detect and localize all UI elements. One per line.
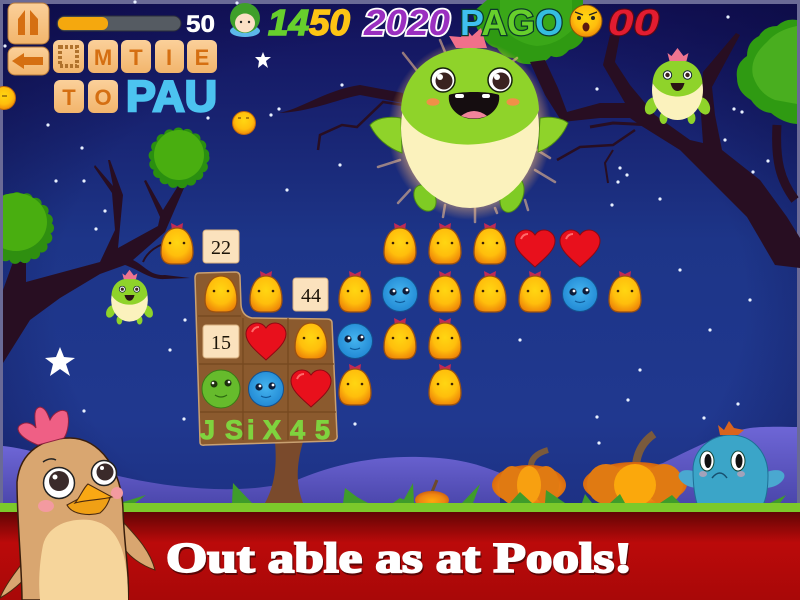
game grid row 2 [205, 271, 641, 312]
tile 44 [293, 278, 328, 311]
hen mascot [0, 407, 155, 600]
HUD: letter tiles: O [94, 85, 112, 110]
HUD: score 1450: 1450 [268, 2, 350, 43]
HUD: red zeros: 00 [608, 2, 659, 43]
white star left [45, 347, 75, 376]
wings [0, 548, 40, 598]
tree crown: left [0, 190, 48, 268]
HUD: pause button [8, 3, 49, 44]
tree crown: right [737, 20, 797, 124]
medium pumpkin [492, 450, 566, 505]
tree crown: top [473, 0, 583, 64]
post [265, 442, 303, 503]
tile 44: 44 [301, 285, 321, 307]
tile 22: 22 [211, 237, 231, 259]
tile 15: 15 [211, 332, 231, 354]
belly [39, 520, 128, 600]
body [17, 438, 128, 600]
stars [3, 0, 770, 445]
burst glow and rays [378, 40, 555, 222]
mouth [449, 92, 499, 119]
game grid row 1 [161, 223, 600, 267]
crest [449, 28, 487, 48]
small green monster on branch [642, 48, 713, 124]
HUD: PAU word: PAU [126, 72, 217, 121]
small green monster at left [104, 270, 155, 324]
orange ball left [0, 86, 16, 110]
blue sad monster [676, 421, 787, 507]
HUD: letter tiles: M [94, 45, 112, 70]
arms [538, 117, 568, 152]
HUD: avatar icon [230, 3, 260, 37]
left eye [44, 468, 74, 498]
game grid row 4 [202, 364, 461, 408]
green blob [202, 370, 240, 408]
small pumpkin [415, 480, 449, 509]
beak [67, 484, 112, 514]
HUD: letter tiles: I [166, 45, 172, 70]
HUD: surprised emoji [570, 5, 602, 37]
brow [43, 459, 56, 462]
right eye [92, 460, 116, 486]
signpost board [195, 272, 337, 503]
cheeks [38, 500, 54, 512]
game grid row 3 [203, 318, 461, 360]
red banner [0, 512, 800, 600]
big green monster [370, 28, 568, 222]
distant hills [3, 427, 797, 510]
HUD: PAGO: PAGO [460, 2, 563, 43]
HUD: letter tiles [53, 40, 217, 113]
banner headline: Out able as at Pools! [166, 536, 632, 582]
body [401, 48, 539, 208]
tree: left branches [3, 160, 190, 363]
grass tufts [120, 483, 786, 503]
board letters: JSiX45 [200, 415, 330, 445]
crest [18, 407, 68, 445]
HUD: year 2020: 2020 [363, 2, 450, 43]
feet [409, 181, 441, 215]
tree: right branches [278, 33, 800, 268]
large pumpkin [583, 434, 687, 506]
tile 15 [203, 325, 239, 358]
HUD: letter tiles: E [195, 45, 209, 70]
HUD: back button [8, 47, 49, 75]
tile 22 [203, 230, 239, 263]
HUD: progress bar [57, 16, 181, 31]
HUD: score 50: 50 [186, 11, 215, 38]
HUD: letter tiles: T [62, 85, 76, 110]
cheeks [426, 98, 440, 106]
white star top [255, 52, 271, 68]
grass strip [0, 503, 800, 512]
orange ball centre [232, 112, 256, 134]
HUD: letter tiles: T [129, 45, 143, 70]
eyes [431, 68, 455, 92]
tree crown: centre left [154, 130, 204, 183]
board panel [195, 272, 337, 445]
